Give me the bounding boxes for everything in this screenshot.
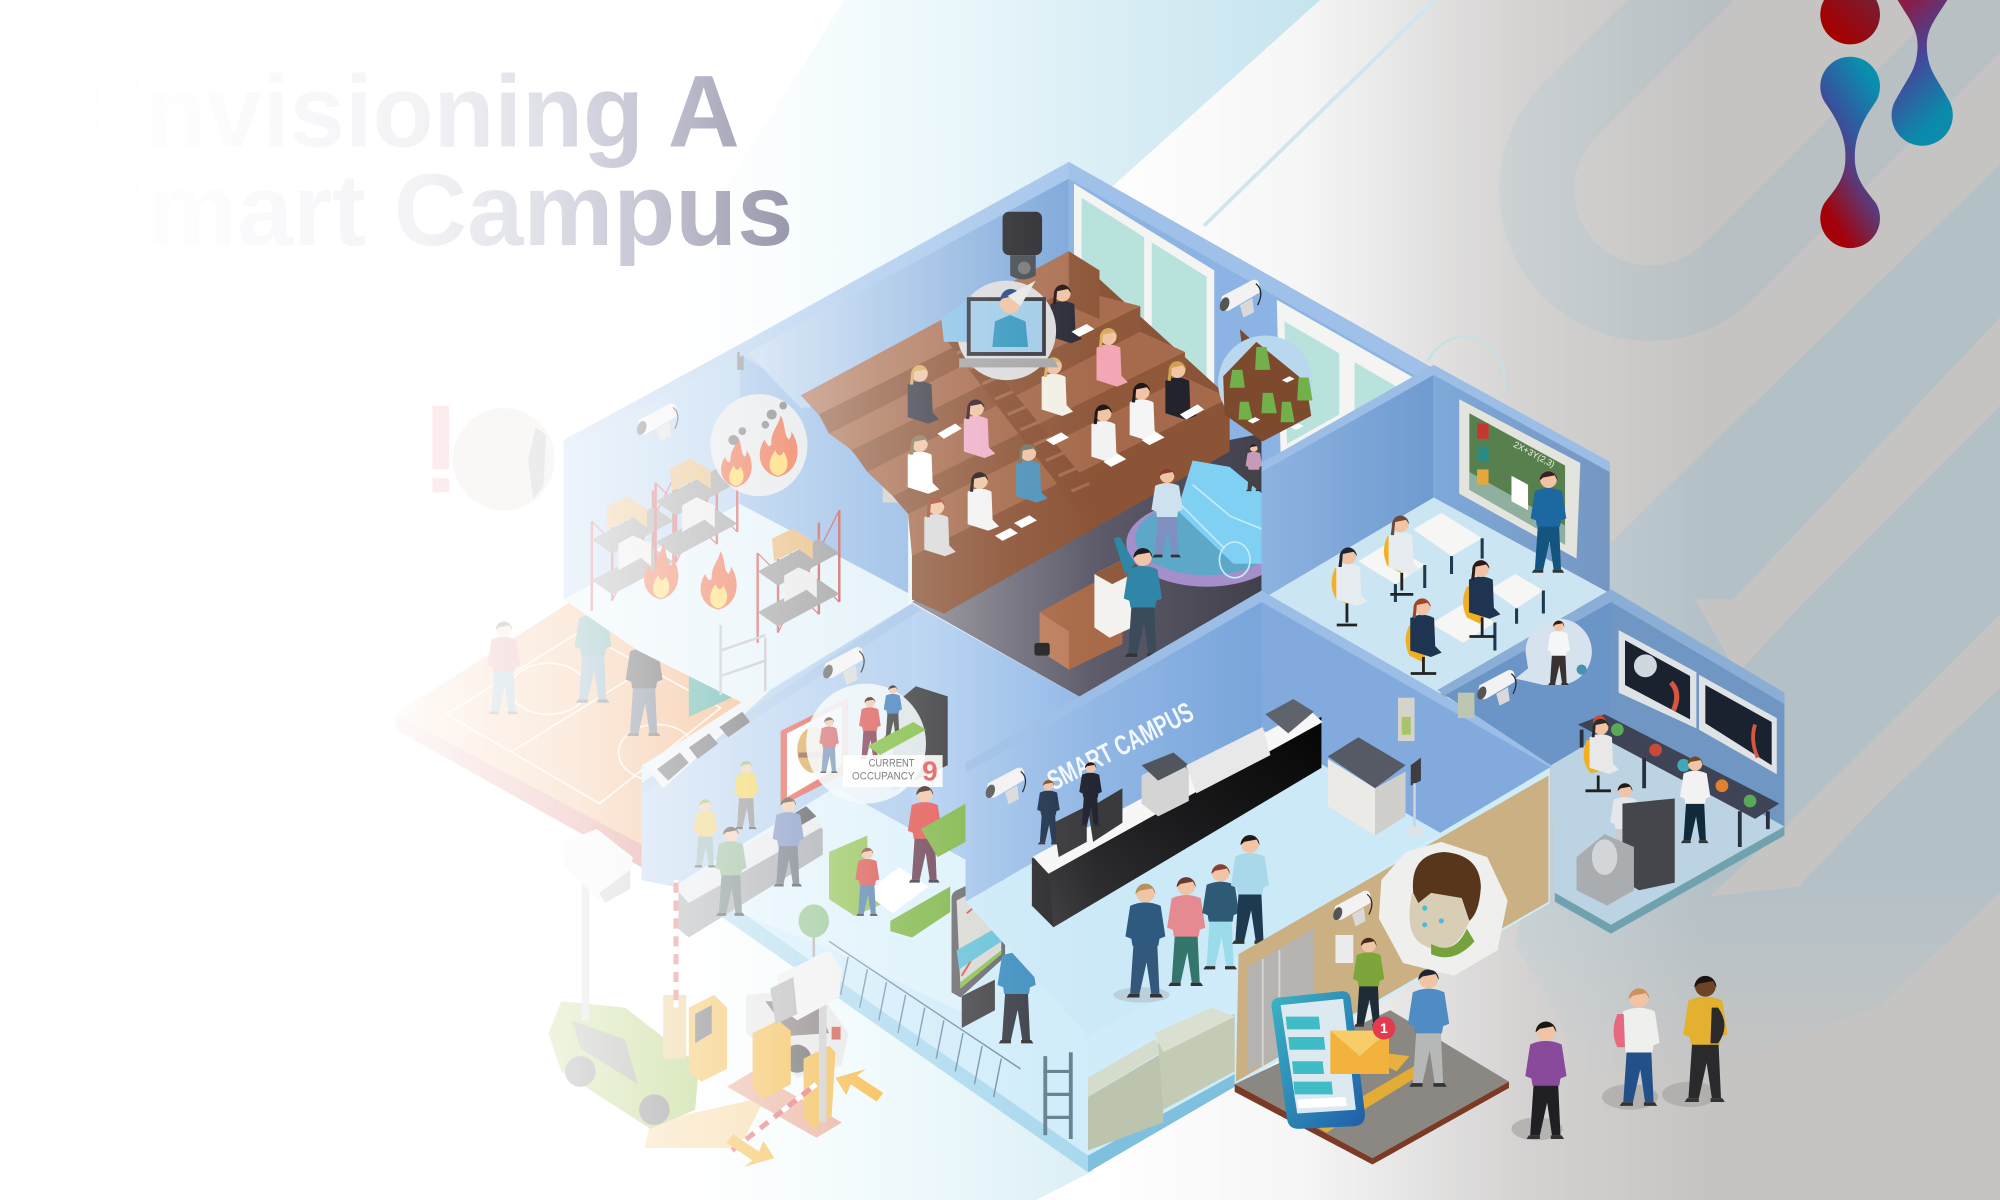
yellow arrows [727, 1069, 883, 1167]
cafeteria and lower hall [642, 599, 1550, 1172]
icon: cafeteria CCTV camera [821, 647, 864, 685]
skylight vent [644, 690, 770, 788]
queue rail fence [829, 941, 1020, 1097]
desk printers [1142, 759, 1189, 816]
presenter woman at hologram [1151, 468, 1183, 557]
title: Envisioning A [79, 55, 740, 169]
pole camera [770, 950, 842, 1122]
icon: hall CCTV camera [984, 768, 1026, 804]
lecture hall back walls [740, 162, 1434, 599]
text: occupancy label: 9 [922, 756, 938, 787]
bubble: current occupancy [806, 684, 943, 804]
classroom floor [1261, 497, 1610, 695]
text: occupancy label: CURRENT [869, 758, 915, 770]
center aisle stairs [944, 330, 1099, 514]
wall sensor box [1398, 698, 1415, 741]
bubble: fire detection [710, 394, 807, 496]
icon: door CCTV camera [1331, 891, 1372, 926]
icon: lab CCTV camera [1476, 670, 1516, 706]
green car [548, 1001, 699, 1129]
panel: stock crates [1043, 1008, 1235, 1151]
smartphone with chat [1272, 991, 1365, 1129]
lab floor [1551, 730, 1784, 925]
dark stage floor [912, 434, 1261, 702]
teacher [1531, 471, 1566, 573]
logo [1820, 0, 1953, 248]
pedestrian: woman in purple [1511, 1021, 1567, 1140]
background: thin pale blue diagonal line [1204, 0, 1435, 226]
pedestrian: student with pink backpack [1602, 988, 1660, 1110]
tan entry wall [1236, 776, 1548, 1082]
white car [746, 989, 848, 1078]
icon: storage shelves [592, 440, 839, 702]
wall poster: burger [781, 698, 848, 806]
scientists [1584, 719, 1710, 867]
warehouse room [564, 344, 908, 714]
lab machines [1577, 798, 1675, 906]
lab left wall [1438, 593, 1611, 765]
entrance lobby [1235, 776, 1548, 1165]
background: pale ring arc [1427, 337, 1505, 389]
smart board [1459, 399, 1580, 559]
main floor slab [642, 599, 1550, 1172]
pole camera [562, 829, 633, 1020]
reception desk [1032, 699, 1323, 927]
small tree [798, 904, 829, 957]
icon: fires on floor [644, 544, 737, 610]
lab bench with flasks [1578, 714, 1779, 847]
parking area [548, 829, 883, 1167]
person at kiosk [998, 934, 1036, 1043]
background: diagonal blue-grey bands [1515, 0, 2000, 1071]
bubble: live lecture on laptop [941, 281, 1059, 380]
students seated on tiers [908, 285, 1204, 556]
barrier arms [676, 880, 816, 1154]
icon: PTZ dome camera [1003, 212, 1042, 306]
ghost hatch marking [644, 1097, 765, 1148]
copier and stand [1328, 737, 1423, 837]
tiered seating [801, 251, 1230, 670]
panel: tall windows [1074, 184, 1413, 454]
reception hall back walls [966, 591, 1554, 1036]
basketball court [395, 598, 765, 867]
map kiosk [952, 869, 1005, 1028]
wall speaker column [893, 686, 948, 791]
title: Smart Campus [79, 153, 793, 267]
lab [1438, 589, 1784, 934]
people at door [1353, 938, 1384, 1027]
background: pale blue diagonal panel [383, 0, 1320, 1200]
payment kiosks [663, 995, 835, 1129]
reception staff [1037, 780, 1060, 844]
text: occupancy label [852, 756, 938, 787]
bubble: occupancy heat view [1218, 329, 1312, 441]
panel: cafeteria walls [642, 603, 1088, 893]
faded alert icon [432, 406, 555, 510]
text: occupancy label: OCCUPANCY [852, 770, 915, 782]
potted plant [1006, 860, 1048, 934]
presenter at podium [1094, 537, 1162, 657]
classroom left wall [1261, 369, 1434, 599]
classroom back wall [1434, 369, 1610, 593]
paving slab [1235, 1010, 1509, 1165]
envelope notification [1330, 1017, 1409, 1074]
students walking in group [1114, 835, 1269, 1003]
barrier island [727, 1071, 842, 1138]
lecture hall [740, 162, 1434, 702]
icon: CCTV camera [635, 404, 678, 441]
classroom [1261, 365, 1610, 703]
wall sensor box [1458, 693, 1474, 718]
door scanner [1335, 935, 1353, 963]
bubble: face recognition [1379, 842, 1508, 976]
diners and booths [829, 786, 966, 938]
envelope notification: 1 [1380, 1020, 1388, 1036]
serving counter and staff [673, 761, 823, 938]
glass doors [1247, 929, 1314, 1071]
text: smart campus wall sign: SMART CAMPUS [1042, 696, 1198, 796]
classroom desks and students [1332, 513, 1543, 673]
lab display screens [1619, 630, 1777, 774]
holographic car display [1126, 460, 1287, 587]
icon: CCTV camera [1218, 280, 1261, 318]
isometric campus illustration [395, 162, 1784, 1172]
pedestrian: student in yellow [1662, 976, 1727, 1107]
smart board: 2X+3Y(2,3) [1512, 439, 1557, 469]
bubble: scientist [1515, 619, 1592, 685]
front desk monitors [1054, 806, 1087, 857]
floor of cafeteria [673, 787, 966, 1014]
lab right wall [1611, 593, 1784, 827]
